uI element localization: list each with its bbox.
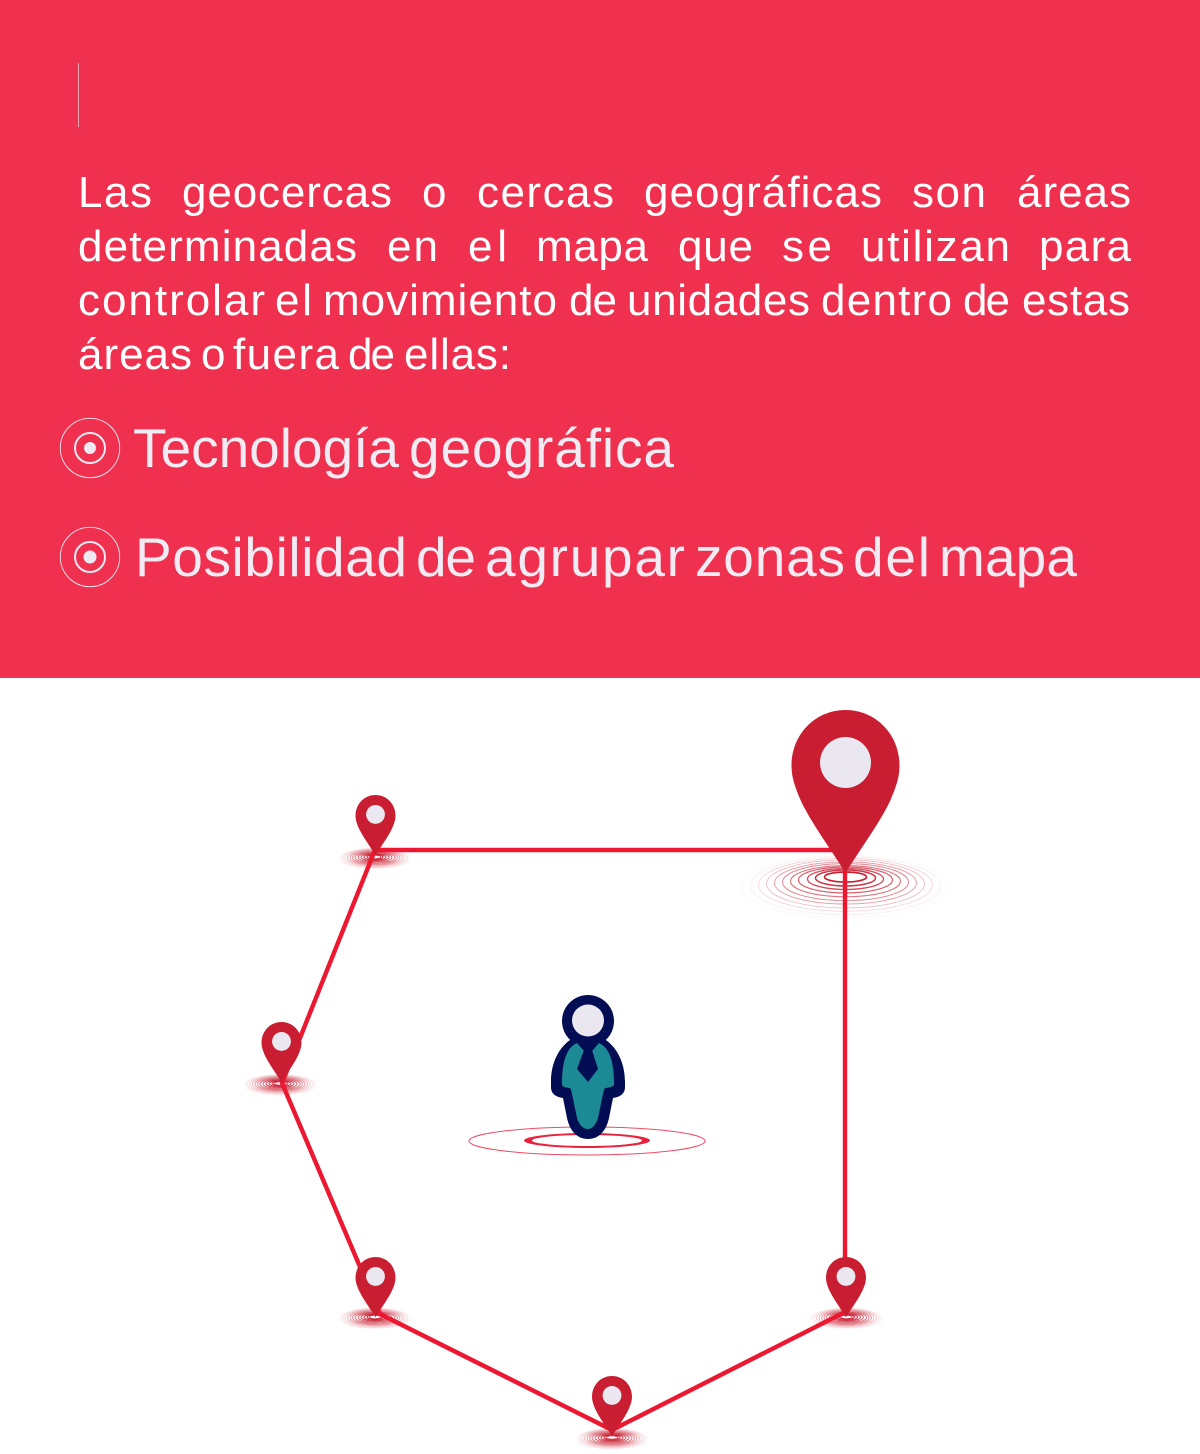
intro paragraph: que	[678, 222, 753, 271]
intro paragraph: cercas	[477, 168, 614, 217]
intro paragraph: dentro	[821, 276, 952, 325]
person with target rings	[469, 995, 705, 1155]
intro paragraph: utilizan	[861, 222, 1010, 271]
intro paragraph: para	[1039, 222, 1132, 271]
list text: agrupar	[485, 526, 685, 588]
intro paragraph: Las	[78, 168, 152, 217]
intro paragraph: determinadas	[78, 222, 357, 271]
intro paragraph: movimiento	[323, 276, 557, 325]
intro paragraph: el	[275, 276, 312, 325]
list text: Posibilidad	[135, 526, 407, 588]
intro paragraph: se	[782, 222, 832, 271]
intro paragraph: geográficas	[644, 168, 882, 217]
target rings	[469, 1127, 705, 1155]
icon: target	[60, 418, 120, 478]
intro paragraph: controlar	[78, 276, 265, 325]
pin ripples	[245, 848, 950, 1449]
intro paragraph: áreas	[1017, 168, 1131, 217]
accent vertical line	[78, 63, 79, 127]
intro paragraph: geocercas	[182, 168, 392, 217]
icon: target	[60, 527, 120, 587]
icon: pin top left	[356, 795, 395, 855]
list item: Tecnología geográfica	[60, 417, 674, 479]
intro paragraph: fuera	[233, 330, 340, 379]
list text: del	[853, 526, 930, 588]
list text: Tecnología	[133, 417, 399, 479]
intro paragraph: o	[422, 168, 446, 217]
list text: mapa	[939, 526, 1077, 588]
icon: pin bottom right	[826, 1257, 866, 1317]
icon: pin bottom left	[356, 1257, 395, 1317]
panel: red header	[0, 0, 1200, 678]
icon: pin bottom center	[592, 1376, 632, 1436]
person figure	[551, 995, 625, 1139]
icon: large location pin	[792, 710, 900, 873]
intro paragraph: unidades	[627, 276, 810, 325]
intro paragraph: áreas	[78, 330, 192, 379]
intro paragraph: son	[912, 168, 986, 217]
geofence boundary line	[282, 850, 845, 1430]
list text: de	[416, 526, 476, 588]
icon: pin left	[262, 1022, 301, 1082]
intro paragraph: ellas:	[404, 330, 511, 379]
intro paragraph: en	[387, 222, 438, 271]
list text: zonas	[695, 526, 845, 588]
intro paragraph: de	[569, 276, 617, 325]
intro paragraph: mapa	[536, 222, 649, 271]
intro paragraph: de	[963, 276, 1010, 325]
intro paragraph: el	[468, 222, 507, 271]
list item: Posibilidad de agrupar zonas del mapa	[60, 526, 1077, 588]
intro paragraph: o	[201, 330, 225, 379]
list text: geográfica	[409, 417, 674, 479]
intro paragraph: de	[348, 330, 395, 379]
intro paragraph: estas	[1022, 276, 1130, 325]
header text and list	[60, 168, 1132, 588]
